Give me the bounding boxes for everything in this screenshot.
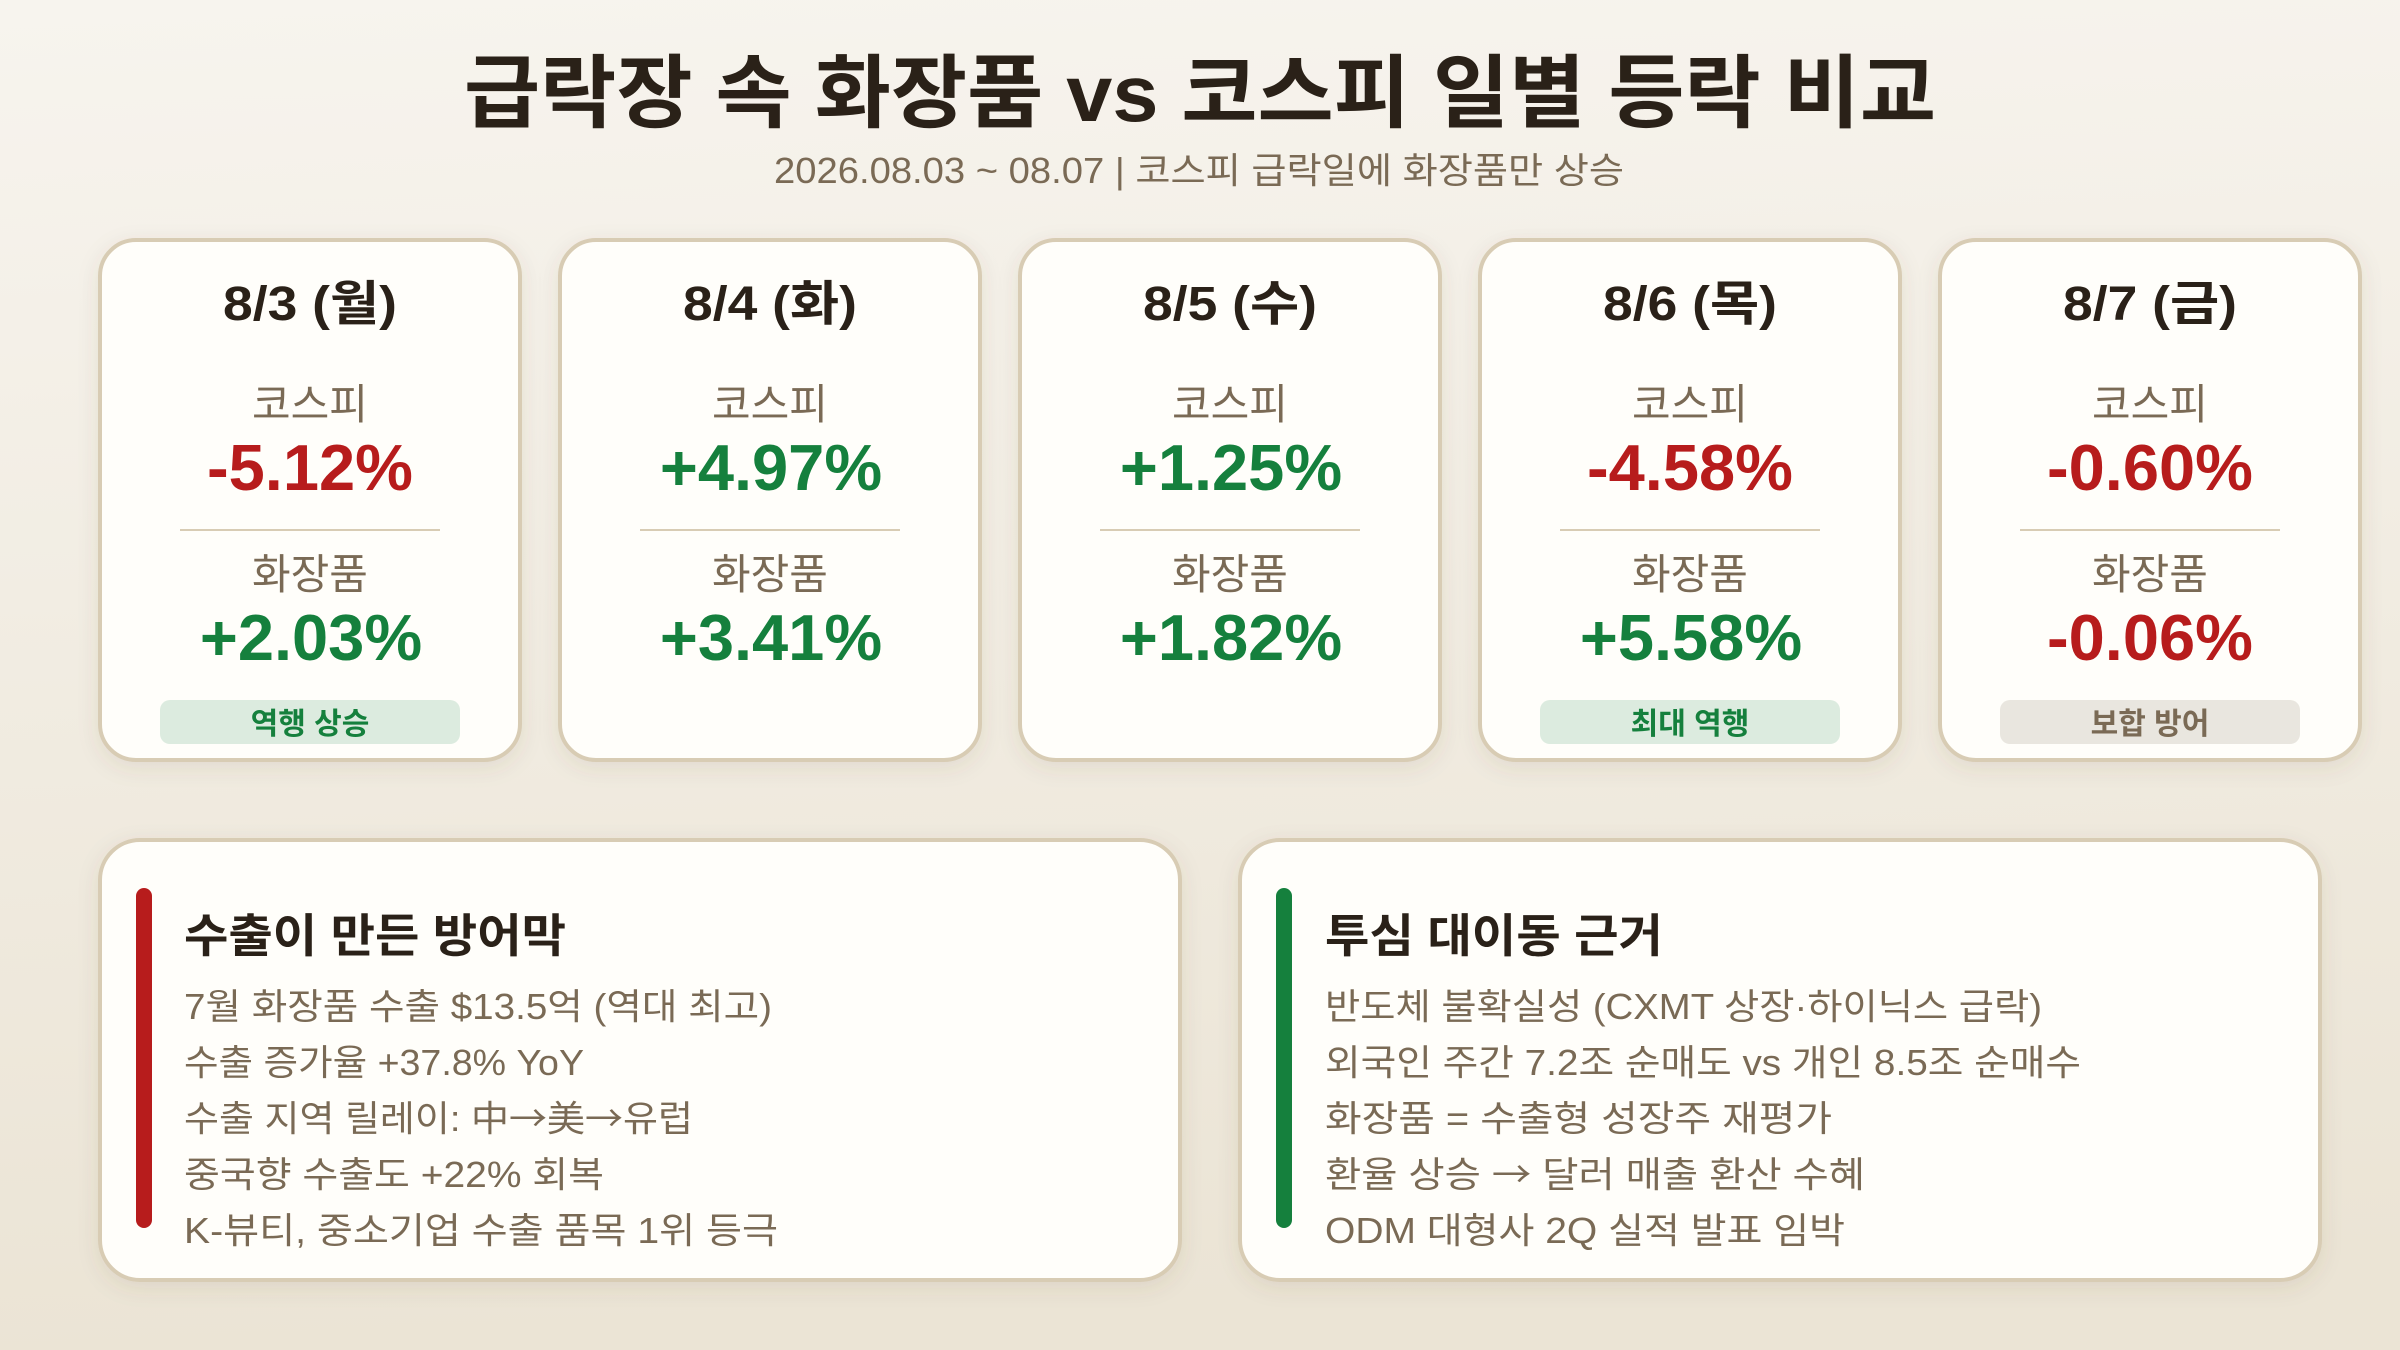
bullet list: K-뷰티, 중소기업 수출 품목 1위 등극 — [184, 1210, 778, 1251]
KOSPI value: -5.12% — [207, 431, 413, 504]
KOSPI value: +1.25% — [1120, 431, 1342, 504]
red accent bar — [136, 888, 152, 1228]
cosmetics value: +3.41% — [660, 601, 882, 674]
KOSPI value: -4.58% — [1587, 431, 1793, 504]
bullet list: 수출 증가율 +37.8% YoY — [184, 1042, 584, 1083]
date: 8/3 (월) — [223, 278, 397, 331]
bullet list — [184, 986, 778, 1251]
badge — [2000, 700, 2300, 744]
cosmetics value: -0.06% — [2047, 601, 2253, 674]
title: 급락장 속 화장품 vs 코스피 일별 등락 비교 — [464, 49, 1936, 138]
KOSPI label: 코스피 — [712, 381, 828, 428]
panel: 8/4 day card — [560, 240, 980, 760]
cosmetics label: 화장품 — [2092, 551, 2208, 598]
date: 8/7 (금) — [2063, 278, 2237, 331]
subtitle: 2026.08.03 ~ 08.07 | 코스피 급락일에 화장품만 상승 — [774, 150, 1624, 191]
KOSPI value: +4.97% — [660, 431, 882, 504]
cosmetics value: +1.82% — [1120, 601, 1342, 674]
badge: 역행 상승 — [251, 708, 369, 741]
KOSPI label: 코스피 — [2092, 381, 2208, 428]
date: 8/6 (목) — [1603, 278, 1777, 331]
bullet list: 반도체 불확실성 (CXMT 상장·하이닉스 급락) — [1325, 986, 2042, 1027]
bullet list: 환율 상승 → 달러 매출 환산 수혜 — [1325, 1146, 1865, 1198]
KOSPI label: 코스피 — [252, 381, 368, 428]
bullet list — [1325, 986, 2081, 1251]
cosmetics value: +5.58% — [1580, 601, 1802, 674]
heading: 수출이 만든 방어막 — [184, 910, 566, 962]
panel: 8/7 day card — [1940, 240, 2360, 760]
badge — [160, 700, 460, 744]
cosmetics value: +2.03% — [200, 601, 422, 674]
heading: 투심 대이동 근거 — [1325, 910, 1663, 962]
date: 8/5 (수) — [1143, 278, 1317, 331]
cosmetics label: 화장품 — [252, 551, 368, 598]
bullet list: 화장품 = 수출형 성장주 재평가 — [1325, 1098, 1832, 1139]
KOSPI label: 코스피 — [1632, 381, 1748, 428]
bullet list: 수출 지역 릴레이: 中 →美→유럽 — [184, 1090, 693, 1142]
panel: investor sentiment — [1240, 840, 2320, 1280]
bullet list: 7월 화장품 수출 $13.5억 (역대 최고) — [184, 986, 772, 1027]
panel: 8/3 day card — [100, 240, 520, 760]
date: 8/4 (화) — [683, 278, 857, 331]
panel: 8/5 day card — [1020, 240, 1440, 760]
cosmetics label: 화장품 — [1172, 551, 1288, 598]
panel: 8/6 day card — [1480, 240, 1900, 760]
badge: 최대 역행 — [1631, 708, 1749, 741]
bullet list: 외국인 주간 7.2조 순매도 vs 개인 8.5조 순매수 — [1325, 1042, 2081, 1083]
panel: export shield — [100, 840, 1180, 1280]
badge: 보합 방어 — [2091, 708, 2209, 741]
KOSPI value: -0.60% — [2047, 431, 2253, 504]
KOSPI label: 코스피 — [1172, 381, 1288, 428]
bullet list: ODM 대형사 2Q 실적 발표 임박 — [1325, 1210, 1845, 1251]
green accent bar — [1276, 888, 1292, 1228]
cosmetics label: 화장품 — [1632, 551, 1748, 598]
badge — [1540, 700, 1840, 744]
bullet list: 중국향 수출도 +22% 회복 — [184, 1154, 604, 1195]
cosmetics label: 화장품 — [712, 551, 828, 598]
